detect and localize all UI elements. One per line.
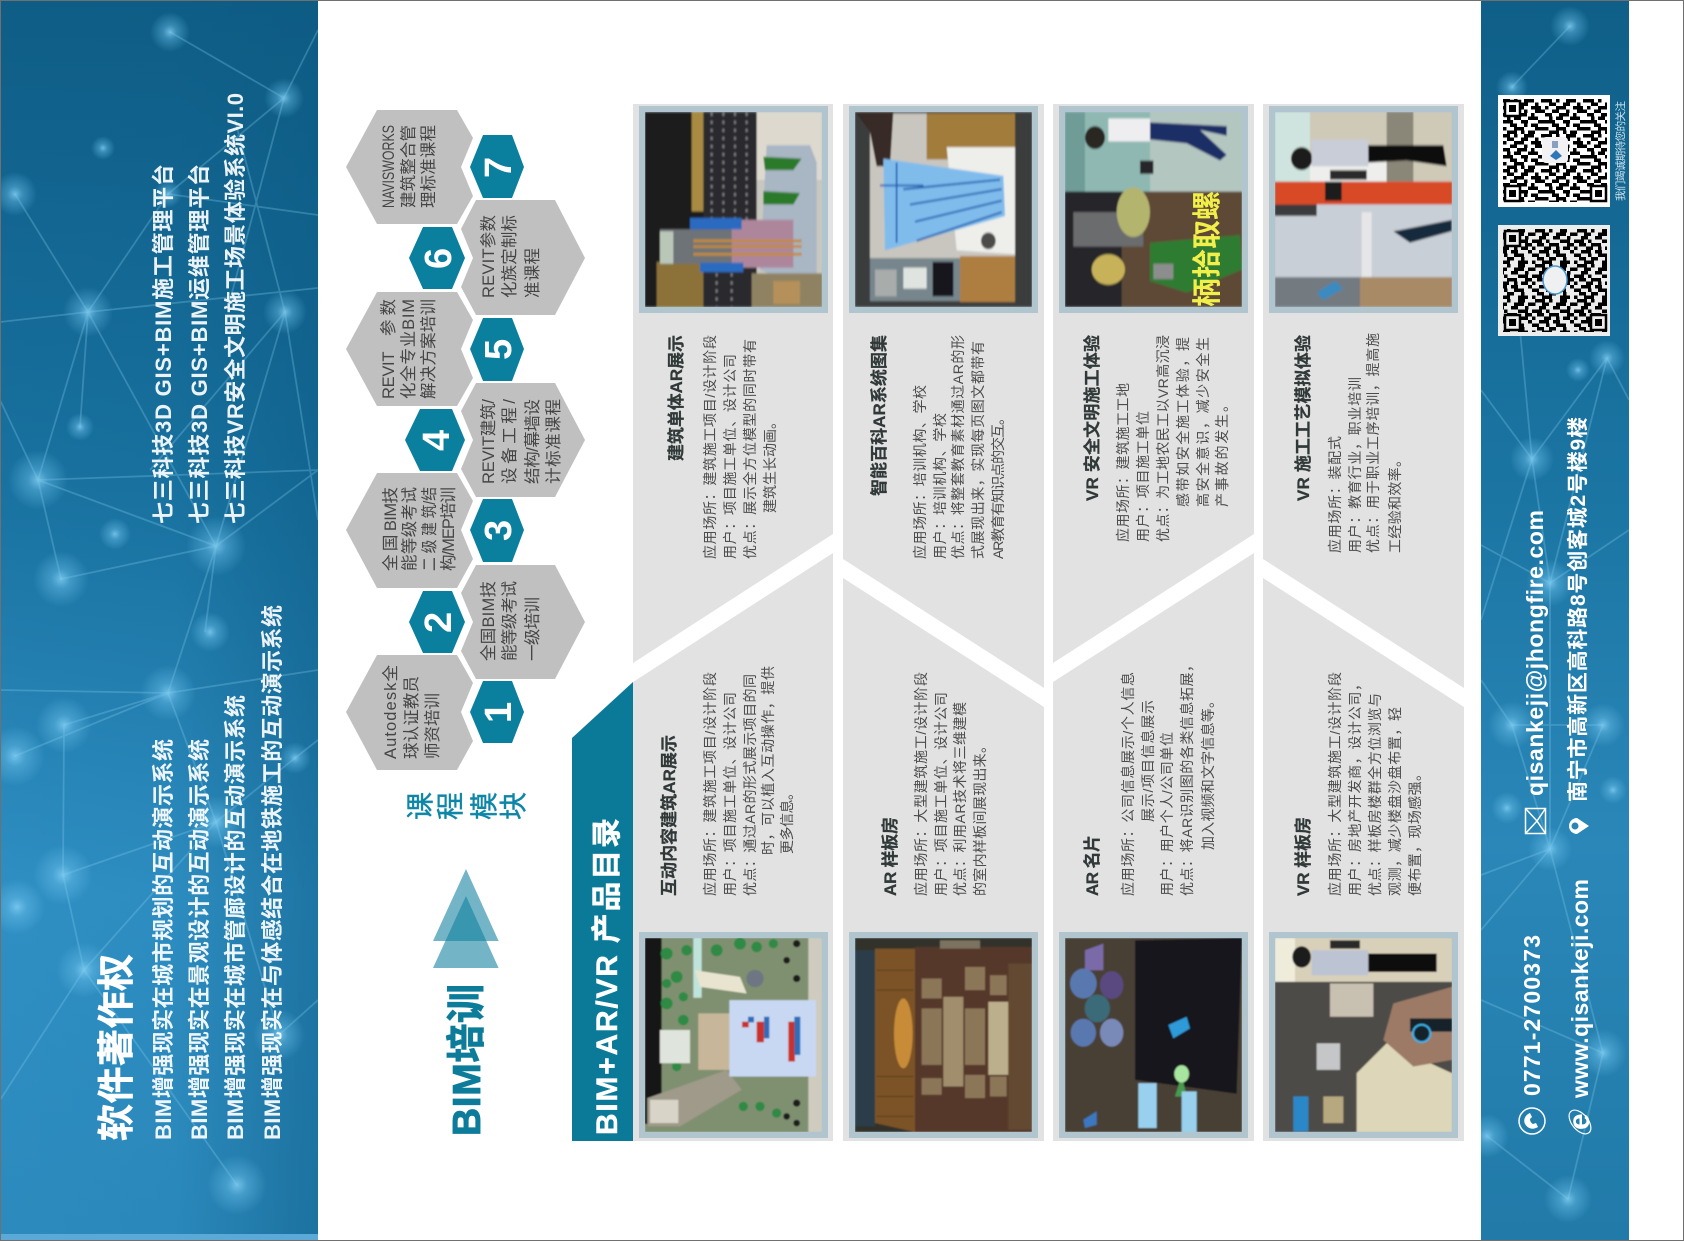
text: VR safety experience: 应用场所：建筑施工工地 bbox=[1115, 383, 1131, 542]
hexagon labels: 化族定制标 bbox=[500, 215, 519, 298]
text: VR safety experience: 高安全意识，减少安全生 bbox=[1195, 337, 1211, 507]
gray hexagons left column bbox=[346, 110, 473, 770]
text: VR process simulation: 应用场所：装配式 bbox=[1327, 436, 1343, 553]
photo: aerial site model with chart bbox=[645, 938, 822, 1132]
text: VR show flat: 用户：房地产开发商，设计公司， bbox=[1347, 677, 1363, 896]
hexagon labels: Autodesk全 bbox=[381, 664, 400, 759]
contact: address: 南宁市高新区高科路8号创客城2号楼9楼 bbox=[1566, 417, 1590, 802]
text: AR business card: 应用场所：公司信息展示/个人信息 bbox=[1120, 672, 1136, 896]
text: interactive AR display: 优点：通过AR的形式展示项目的同 bbox=[742, 674, 758, 896]
numbers: 6 bbox=[418, 248, 460, 269]
text: interactive AR display: 更多信息。 bbox=[779, 786, 795, 854]
list: copyright systems: 七三科技VR安全文明施工场景体验系统VI.0 bbox=[223, 93, 248, 524]
text: smart encyclopedia AR: 优点：将整套教育素材通过AR的形 bbox=[950, 335, 966, 559]
text: tower AR display: 优点：展示全方位模型的同时带有 bbox=[742, 339, 758, 559]
text: AR business card: 优点：将AR识别图的各类信息拓展， bbox=[1179, 658, 1195, 896]
text: interactive AR display: 时，可以植入互动操作，提供 bbox=[760, 666, 776, 855]
hexagon labels: 球认证教员 bbox=[402, 676, 421, 759]
icon: overlapping triangles bbox=[433, 869, 499, 968]
card column 3 bbox=[1053, 104, 1254, 1141]
text: AR show flat: AR 样板房 bbox=[880, 817, 900, 896]
contact: website bbox=[1563, 879, 1596, 1138]
heading: course modules: 块 bbox=[498, 792, 529, 820]
text: VR safety experience: 优点：为工地农民工以VR高沉浸 bbox=[1155, 335, 1171, 542]
text: interactive AR display: 用户：项目施工单位、设计公司 bbox=[722, 692, 738, 896]
contact: phone: 0771-2700373 bbox=[1519, 935, 1545, 1096]
hexagon labels: 二 级 建 筑/结 bbox=[420, 487, 439, 571]
text: VR safety experience: 产事故的发生。 bbox=[1214, 398, 1230, 507]
text: tower AR display: 建筑单体AR展示 bbox=[666, 335, 686, 461]
text: AR show flat: 优点：利用AR技术将三维建模 bbox=[952, 702, 968, 896]
text: smart encyclopedia AR bbox=[869, 335, 1006, 559]
hexagon labels: 解决方案培训 bbox=[419, 299, 438, 399]
text: AR business card: AR 名片 bbox=[1083, 835, 1102, 896]
photo text: game caption: 柄拾取螺 bbox=[1191, 191, 1224, 307]
contact: email: qisankeji@jhongfire.com bbox=[1522, 510, 1548, 796]
text: AR business card: 用户：用户个人/公司单位 bbox=[1159, 732, 1175, 896]
icon: phone bbox=[1519, 1108, 1545, 1134]
heading: software copyright: 软件著作权 bbox=[96, 954, 137, 1141]
card column 1 bbox=[633, 104, 833, 1141]
heading: course modules: 课 bbox=[405, 792, 436, 820]
text: VR process simulation: 优点：用于职业工序培训，提高施 bbox=[1365, 333, 1381, 553]
hexagon labels: REVIT建筑/ bbox=[479, 399, 498, 484]
text: AR business card: 展示/项目信息展示 bbox=[1140, 700, 1156, 822]
numbers: 2 bbox=[418, 612, 460, 633]
list: copyright systems: BIM增强现实在城市规划的互动演示系统 bbox=[151, 739, 176, 1140]
heading: BIM training: BIM培训 bbox=[446, 984, 489, 1136]
panel: contact strip bbox=[1465, 0, 1629, 1241]
text: tower AR display: 用户：项目施工单位、设计公司 bbox=[722, 354, 738, 559]
text: tower AR display: 应用场所：建筑施工项目/设计阶段 bbox=[702, 335, 718, 559]
card column 2 bbox=[843, 104, 1044, 1141]
hexagon labels: 能 等 级 考 试 bbox=[400, 487, 419, 571]
text: smart encyclopedia AR: 智能百科AR系统图集 bbox=[869, 335, 889, 496]
numbers: 7 bbox=[478, 157, 520, 178]
hexagon labels: REVIT 参 数 bbox=[379, 298, 398, 399]
photo: VR show flat bbox=[1275, 938, 1452, 1132]
numbers: 4 bbox=[416, 430, 458, 451]
hexagon labels bbox=[379, 125, 563, 759]
text: VR safety experience bbox=[1082, 335, 1230, 542]
text: VR show flat: 便布置，现场感强。 bbox=[1407, 767, 1423, 896]
text: interactive AR display bbox=[659, 666, 795, 896]
icon: browser e: e bbox=[1563, 1113, 1596, 1130]
gray hexagons right column bbox=[461, 200, 585, 679]
photo: tower AR model bbox=[645, 112, 822, 307]
list: copyright systems: BIM增强现实在城市管廊设计的互动演示系统 bbox=[223, 695, 248, 1140]
text: VR show flat: 应用场所：大型建筑施工/设计阶段 bbox=[1327, 672, 1343, 896]
list: copyright systems bbox=[151, 93, 285, 1140]
text: interactive AR display: 应用场所：建筑施工项目/设计阶段 bbox=[702, 672, 718, 896]
panel: software copyright (left blue panel) bbox=[0, 0, 318, 1241]
hexagon labels: 一级培训 bbox=[523, 597, 542, 661]
hexagon labels: 理标准课程 bbox=[419, 125, 438, 208]
icon: envelope bbox=[1526, 808, 1546, 834]
numbers: 5 bbox=[478, 339, 520, 360]
hexagon labels: 准课程 bbox=[523, 248, 542, 298]
text: VR safety experience: VR 安全文明施工体验 bbox=[1082, 335, 1102, 501]
numbers: 3 bbox=[478, 520, 520, 541]
heading: course modules: 程 bbox=[435, 792, 466, 820]
text: VR process simulation bbox=[1293, 333, 1403, 553]
teal number hexagons bbox=[405, 135, 524, 743]
heading: course modules: 模 bbox=[469, 792, 500, 820]
text: AR business card bbox=[1083, 658, 1216, 896]
text: AR show flat: 的室内样板间展现出来。 bbox=[972, 739, 988, 896]
photo: AR encyclopedia bbox=[855, 112, 1032, 307]
icon: location pin bbox=[1569, 818, 1589, 834]
hexagon labels: 构/MEP培训 bbox=[439, 487, 458, 571]
hexagon labels: 全国BIM技 bbox=[479, 581, 498, 661]
hexagon labels: 建筑整合管 bbox=[399, 125, 418, 208]
text: AR business card: 加入视频和文字信息等。 bbox=[1200, 694, 1216, 850]
text: VR safety experience: 感带如安全施工体验，提 bbox=[1175, 337, 1191, 507]
text: VR show flat: 优点：样板房楼群全方位浏览与 bbox=[1367, 693, 1383, 896]
caption: follow us: 我们竭诚期待您的关注 bbox=[1614, 100, 1627, 201]
text: tower AR display bbox=[666, 335, 778, 559]
numbers: 1 bbox=[478, 702, 520, 723]
text: VR process simulation: VR 施工工艺模拟体验 bbox=[1293, 335, 1313, 501]
photo: VR safety experience bbox=[1065, 112, 1242, 307]
hexagon labels: 结构/幕墙设 bbox=[523, 399, 542, 484]
hexagon labels: 全 国 BIM技 bbox=[381, 487, 400, 571]
hexagon flow: course modules 1-7 bbox=[346, 110, 585, 770]
photo: AR show flat bbox=[855, 938, 1032, 1132]
hexagon labels: REVIT参数 bbox=[479, 214, 498, 298]
text: smart encyclopedia AR: 式展现出来，实现每页图文都带有 bbox=[970, 341, 986, 559]
hexagon labels: 能等级考试 bbox=[500, 581, 519, 661]
list: copyright systems: 七三科技3D GIS+BIM施工管理平台 bbox=[151, 164, 176, 524]
list: copyright systems: BIM增强现实在与体感结合在地铁施工的互动演示系统 bbox=[260, 605, 285, 1140]
heading: course modules bbox=[405, 792, 529, 820]
text: VR show flat bbox=[1293, 672, 1423, 896]
hexagon labels: 设 备 工 程 / bbox=[500, 399, 519, 484]
text: VR show flat: VR 样板房 bbox=[1293, 817, 1313, 896]
icon: browser e bbox=[1563, 1106, 1596, 1138]
QR code 1 bbox=[1498, 95, 1610, 207]
text: AR show flat: 用户：项目施工单位、设计公司 bbox=[933, 692, 949, 896]
hexagon labels: 师资培训 bbox=[423, 693, 442, 759]
text: VR safety experience: 用户：项目施工单位 bbox=[1135, 411, 1151, 542]
text: interactive AR display: 互动内容建筑AR展示 bbox=[659, 735, 679, 896]
QR code 2 bbox=[1498, 225, 1610, 336]
photo: AR business card bbox=[1065, 938, 1242, 1132]
list: copyright systems: BIM增强现实在景观设计的互动演示系统 bbox=[187, 739, 212, 1140]
hexagon labels: NAVISWORKS bbox=[380, 125, 398, 208]
text: VR process simulation: 用户：教育行业，职业培训 bbox=[1347, 377, 1363, 553]
text: AR show flat: 应用场所：大型建筑施工/设计阶段 bbox=[913, 672, 929, 896]
list: copyright systems: 七三科技3D GIS+BIM运维管理平台 bbox=[187, 164, 212, 524]
heading: catalog title: BIM+AR/VR 产品目录 bbox=[591, 818, 624, 1135]
hexagon labels: 计标准课程 bbox=[544, 399, 563, 484]
contact: website: www.qisankeji.com bbox=[1567, 879, 1593, 1099]
text: smart encyclopedia AR: 用户：培训机构、学校 bbox=[932, 413, 948, 559]
text: tower AR display: 建筑生长动画。 bbox=[762, 415, 778, 513]
text: AR show flat bbox=[880, 672, 988, 896]
photo: VR process simulation bbox=[1275, 112, 1452, 307]
text: smart encyclopedia AR: AR教育有知识点的交互。 bbox=[990, 411, 1006, 559]
text: VR show flat: 观测，减少楼盘沙盘布置，轻 bbox=[1387, 707, 1403, 896]
text: VR process simulation: 工经验和效率。 bbox=[1387, 453, 1403, 553]
hexagon labels: 化全专业BIM bbox=[399, 299, 418, 399]
numbers bbox=[416, 157, 520, 723]
text: smart encyclopedia AR: 应用场所：培训机构、学校 bbox=[912, 385, 928, 559]
card column 4 bbox=[1263, 104, 1464, 1141]
panel: product catalog header bbox=[572, 682, 633, 1141]
